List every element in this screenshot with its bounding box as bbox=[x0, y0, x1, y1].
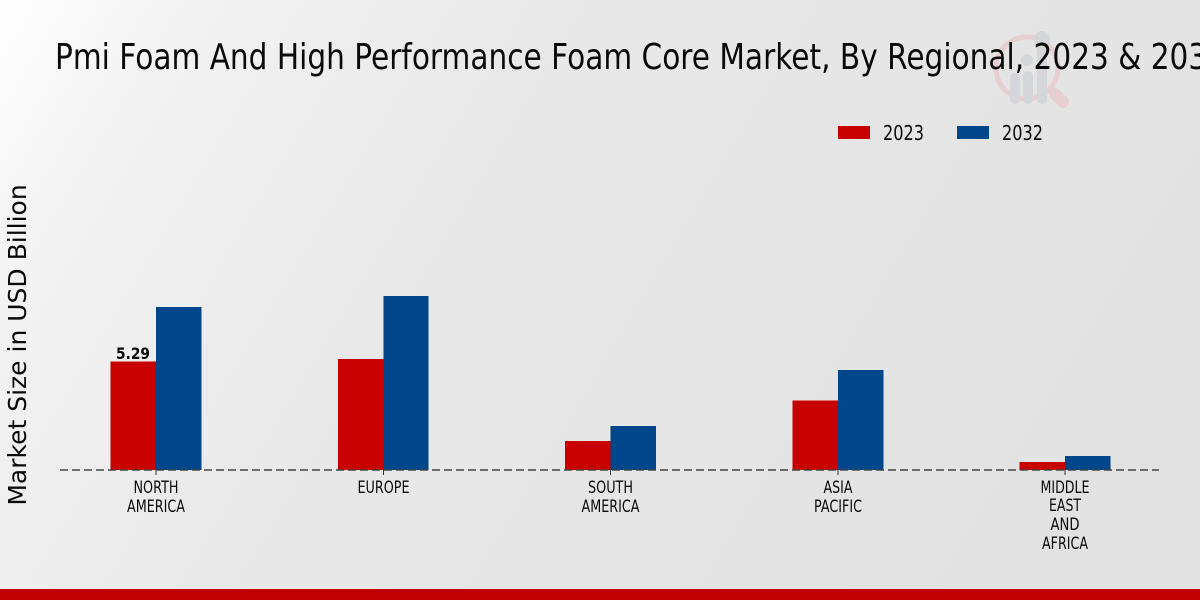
label: Middle East and Africa bbox=[1040, 478, 1090, 553]
label: South America bbox=[582, 478, 640, 516]
category labels bbox=[127, 478, 1090, 553]
legend: 2023: 2023 bbox=[883, 121, 924, 145]
bars: South America bbox=[565, 426, 656, 470]
label: South America: SOUTH bbox=[588, 478, 633, 497]
legend: 2032: 2032 bbox=[1002, 121, 1043, 145]
bar chart bbox=[110, 296, 1110, 470]
label: North America bbox=[127, 478, 186, 516]
bars: North America bbox=[110, 307, 202, 470]
bars: Europe bbox=[338, 296, 428, 470]
y axis label: Market Size in USD Billion bbox=[3, 184, 32, 506]
label: Asia Pacific bbox=[814, 478, 862, 516]
footer bar bbox=[0, 589, 1200, 600]
label: Middle East and Africa: AFRICA bbox=[1042, 534, 1089, 553]
label: Middle East and Africa: EAST bbox=[1049, 496, 1082, 515]
label: South America: AMERICA bbox=[582, 497, 640, 516]
label: Middle East and Africa: AND bbox=[1050, 515, 1080, 534]
bars: Asia Pacific bbox=[792, 370, 884, 470]
label: North America: AMERICA bbox=[127, 497, 186, 516]
bars: Middle East and Africa bbox=[1020, 456, 1110, 470]
label: Asia Pacific: ASIA bbox=[824, 478, 853, 497]
legend: 2032 bbox=[957, 121, 1043, 145]
baseline bbox=[60, 469, 1159, 471]
label: Europe: EUROPE bbox=[358, 478, 410, 497]
legend bbox=[838, 121, 1043, 145]
label: Middle East and Africa: MIDDLE bbox=[1040, 478, 1090, 497]
label: Asia Pacific: PACIFIC bbox=[814, 497, 862, 516]
label: North America: NORTH bbox=[134, 478, 178, 497]
legend: 2023 bbox=[838, 121, 924, 145]
icon: watermark logo bbox=[996, 31, 1063, 102]
data label: 5.29: 5.29 bbox=[116, 344, 150, 363]
